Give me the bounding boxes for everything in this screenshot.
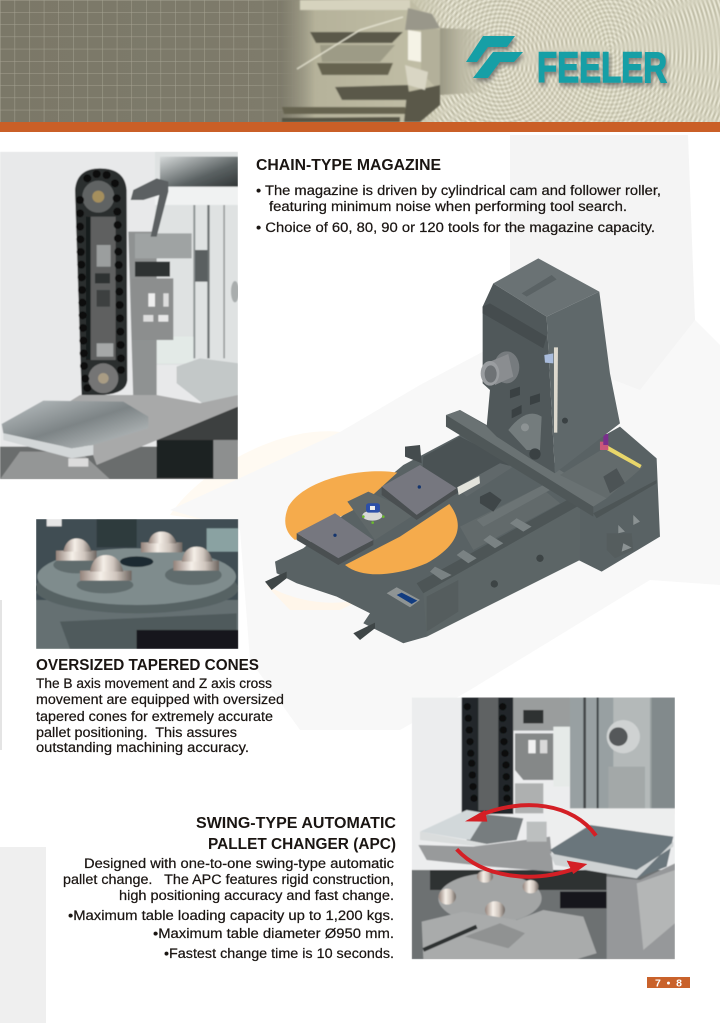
header spindle image xyxy=(280,0,490,122)
machine base xyxy=(275,410,660,643)
heading: chain-type magazine: CHAIN-TYPE MAGAZINE xyxy=(256,157,441,174)
machine spindle xyxy=(481,351,519,386)
text: pallet changer body: high positioning accuracy and fast change. xyxy=(119,888,394,903)
arrow: swing upper xyxy=(465,805,596,836)
text: pallet changer body: •Maximum table diameter Ø950 mm. xyxy=(153,926,394,941)
rotary union centre xyxy=(362,503,385,524)
text: pallet changer body: •Fastest change time is 10 seconds. xyxy=(164,946,394,961)
machine column xyxy=(483,258,620,473)
pallet table: front xyxy=(297,513,373,565)
heading: swing-type automatic pallet changer: PALLET CHANGER (APC) xyxy=(208,836,396,853)
heading: swing-type automatic pallet changer: SWING-TYPE AUTOMATIC xyxy=(196,815,396,832)
text: pallet changer body: Designed with one-to-one swing-type automatic xyxy=(84,856,394,871)
photo: chain-type magazine xyxy=(0,152,239,479)
orange pallet disc: left xyxy=(285,471,397,540)
header ripple texture xyxy=(410,0,720,122)
page number xyxy=(647,977,690,990)
yellow way cover xyxy=(457,476,480,495)
text: oversized tapered cones body: movement are equipped with oversized xyxy=(36,692,284,707)
text: oversized tapered cones body: outstanding machining accuracy. xyxy=(36,740,249,755)
text: chain-type magazine bullets: • The magazine is driven by cylindrical cam and follower roller, xyxy=(256,183,661,198)
photo: swing-type pallet changer xyxy=(412,697,675,959)
text: oversized tapered cones body: tapered cones for extremely accurate xyxy=(36,709,273,724)
logo: Feeler wordmark: FEELER xyxy=(537,44,667,92)
text: pallet changer body xyxy=(63,856,394,961)
text: oversized tapered cones body xyxy=(36,676,284,755)
text: chain-type magazine bullets xyxy=(256,183,661,235)
text: chain-type magazine bullets: featuring minimum noise when performing tool search. xyxy=(269,199,627,214)
photo: oversized tapered cones xyxy=(35,519,238,649)
text: oversized tapered cones body: pallet positioning. This assures xyxy=(36,725,237,740)
logo: Feeler mark xyxy=(466,36,523,78)
text: chain-type magazine bullets: • Choice of 60, 80, 90 or 120 tools for the magazine capacity. xyxy=(256,220,655,235)
heading: oversized tapered cones: OVERSIZED TAPERED CONES xyxy=(36,657,259,674)
text: pallet changer body: pallet change. The APC features rigid construction, xyxy=(63,872,394,887)
arrow: swing lower xyxy=(457,849,587,877)
pallet table: rear xyxy=(382,465,457,520)
heading: swing-type automatic pallet changer xyxy=(196,815,396,853)
text: pallet changer body: •Maximum table loading capacity up to 1,200 kgs. xyxy=(68,908,394,923)
machine illustration xyxy=(265,258,660,643)
page number: 7 • 8 xyxy=(655,978,682,990)
text: oversized tapered cones body: The B axis movement and Z axis cross xyxy=(36,676,272,691)
header banner xyxy=(0,0,720,122)
orange pallet disc: right xyxy=(345,504,458,574)
pallet carriage xyxy=(347,492,417,540)
front end details xyxy=(265,445,422,640)
orange header rule xyxy=(0,122,720,132)
